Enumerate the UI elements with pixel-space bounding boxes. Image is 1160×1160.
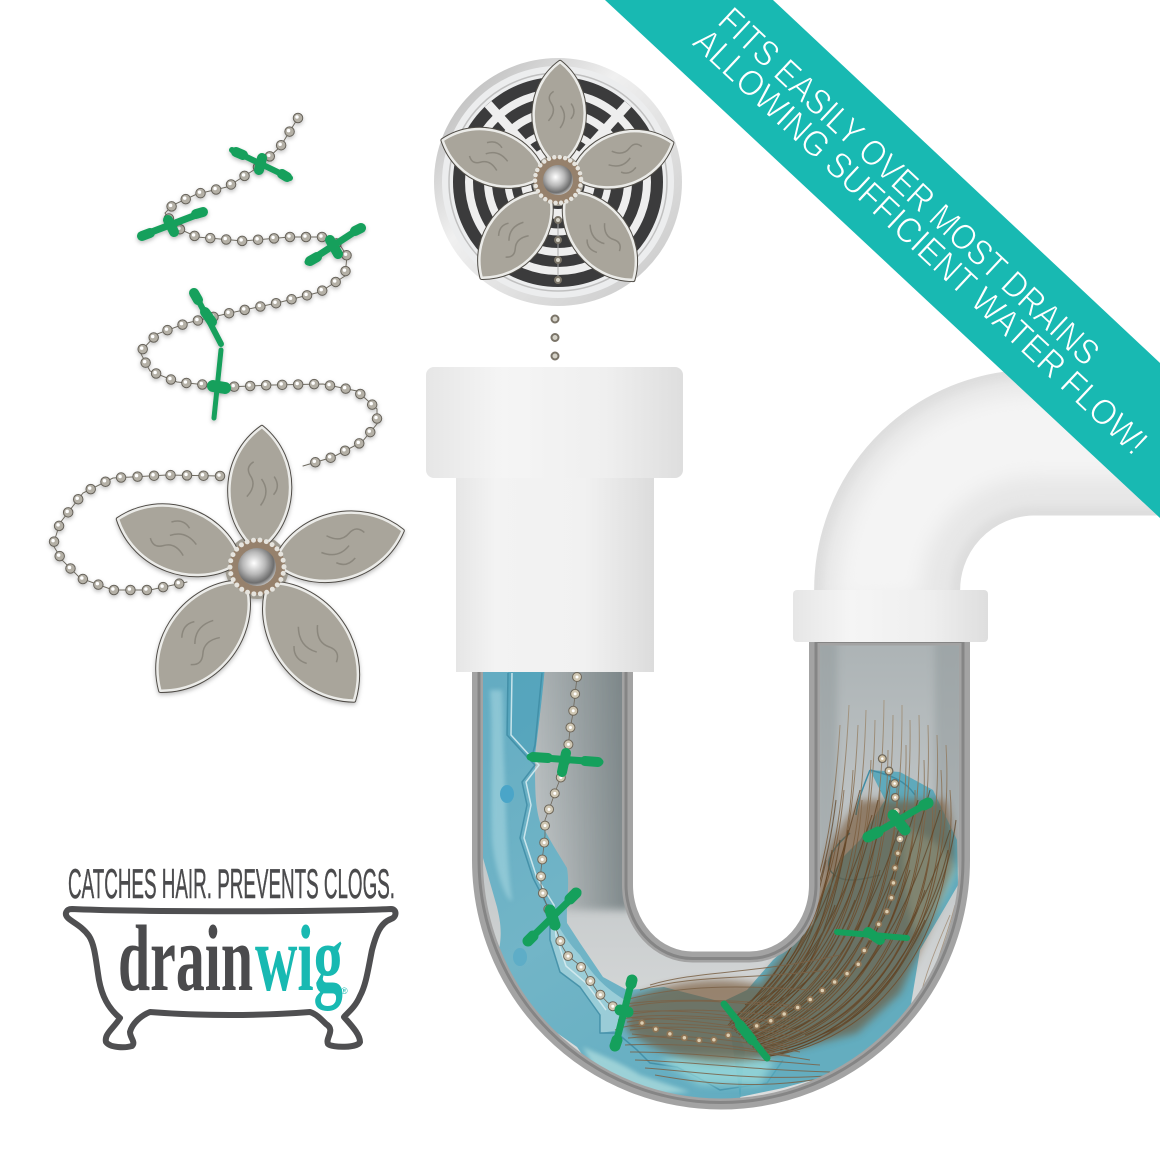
pale water band: [550, 928, 624, 1032]
lower left petal: [461, 179, 567, 294]
water ripple highlights: [511, 673, 606, 1010]
green bristles on loose chain: [141, 150, 362, 418]
right pipe collar: [793, 590, 988, 642]
lower hair strands: [615, 955, 860, 1085]
registered mark: ®: [341, 986, 348, 996]
green bristles inside pipe: [527, 753, 928, 1058]
pipe wall inner line: [478, 640, 964, 1104]
upper hair strands: [728, 700, 951, 1057]
interior shading: [482, 640, 965, 1110]
wordmark drain: drain: [118, 907, 253, 1011]
drain cover with flower: [434, 58, 682, 306]
top petal: [533, 62, 586, 162]
banner text line one: FITS EASILY OVER MOST DRAINS: [711, 0, 1108, 373]
logo: [66, 860, 396, 1047]
beads between drain and pipe: [550, 319, 560, 358]
left petal: [434, 115, 548, 199]
transparent U-bend: [478, 640, 965, 1110]
pipe elbow: [880, 435, 1160, 600]
upper pipe collar: [426, 367, 683, 478]
lower left petal: [134, 566, 268, 712]
water highlight: [490, 690, 512, 901]
water on the left side: [482, 665, 745, 1110]
beads through drain: [557, 220, 559, 282]
water dark upper strip: [508, 672, 544, 756]
wordmark wig: wig: [255, 907, 343, 1011]
droplets: [500, 785, 527, 966]
upper pipe neck: [456, 470, 654, 672]
lower right petal: [548, 180, 655, 296]
right petal: [272, 499, 410, 593]
pale stray hairs: [922, 905, 955, 988]
loose chain with green bristles: [52, 117, 377, 590]
upper hair strands second pass: [730, 780, 956, 1056]
lower right petal: [244, 567, 383, 721]
pipe wall: [478, 640, 964, 1104]
water ripple lines: [507, 673, 783, 1090]
large flower charm: [108, 426, 410, 721]
water glare low: [660, 1053, 775, 1085]
pipe interior: [478, 640, 964, 1104]
water on the right side: [726, 770, 958, 1097]
water glare: [903, 830, 955, 935]
top petal: [228, 426, 292, 546]
water curl outline: [829, 770, 915, 880]
teal banner: [605, 0, 1160, 518]
hair mass: [615, 700, 958, 1095]
right petal: [568, 118, 680, 199]
pale water low: [583, 1047, 690, 1095]
left petal: [108, 489, 245, 589]
infographic canvas: CATCHES HAIR. PREVENTS CLOGS.: [68, 860, 395, 907]
bathtub outline: [66, 909, 396, 1047]
chain inside pipe: [541, 677, 900, 1041]
